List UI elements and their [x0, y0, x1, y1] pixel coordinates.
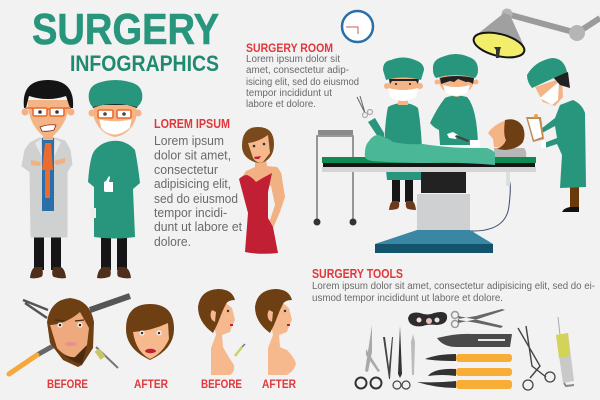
icon: knife — [437, 334, 512, 347]
text block: surgery room: tempor incididunt ut — [246, 88, 332, 99]
illustration: instrument trolley — [314, 130, 356, 226]
text block: lorem ipsum: Lorem ipsum — [154, 133, 224, 148]
icon: orange handled scalpels — [417, 354, 512, 389]
icon: scissors — [452, 309, 505, 328]
text block: surgery tools: SURGERY TOOLS — [312, 267, 403, 281]
illustration: surgeon centre — [430, 54, 478, 145]
labels: before and after: AFTER — [134, 379, 169, 391]
illustration: surgery tools — [356, 309, 574, 390]
icon: hemostat — [518, 326, 555, 390]
text block: lorem ipsum: consectetur — [154, 162, 219, 177]
text block: surgery room: isicing elit, sed do eiusmod — [246, 77, 359, 88]
title: SURGERY — [32, 5, 219, 54]
figure: woman in red dress — [239, 127, 285, 254]
icon: kidney dish — [408, 312, 447, 326]
icon: syringe — [556, 317, 574, 386]
illustration: surgeon left — [357, 58, 424, 210]
illustration: profile after — [255, 289, 296, 375]
illustration: operating table with patient — [322, 119, 536, 253]
text block: lorem ipsum: tempor incidi- — [154, 205, 227, 220]
text block: surgery room — [246, 43, 359, 110]
illustration: face after — [126, 304, 174, 360]
text block: lorem ipsum: dolore. — [154, 234, 191, 249]
text block: surgery tools — [312, 267, 595, 304]
text block: surgery room: labore et dolore. — [246, 99, 316, 110]
text block: surgery tools: Lorem ipsum dolor sit amet, consectetur adipisicing elit, sed do ei- — [312, 281, 595, 292]
text block: lorem ipsum — [154, 116, 242, 249]
text block: lorem ipsum: dunt ut labore et — [154, 219, 242, 234]
text block: lorem ipsum: sed do eiusmod — [154, 191, 238, 206]
text block: surgery room: amet, consectetur adip- — [246, 65, 349, 76]
icon: thin scissors — [393, 326, 410, 389]
labels: before and after: AFTER — [262, 379, 297, 391]
icon: wall clock — [342, 11, 373, 42]
illustration: profile before — [198, 289, 245, 375]
illustration: face surgery before — [9, 296, 130, 374]
illustration: surgeon with clipboard — [526, 58, 586, 212]
labels: before and after: BEFORE — [47, 379, 88, 391]
text block: surgery tools: usmod tempor incididunt ut labore et dolore. — [312, 293, 503, 304]
icon: large scissors — [356, 325, 382, 388]
figure: doctor in white coat — [22, 80, 74, 278]
text block: lorem ipsum: LOREM IPSUM — [154, 116, 230, 131]
icon: probe — [411, 334, 415, 375]
text block: surgery room: SURGERY ROOM — [246, 43, 333, 55]
labels: before and after — [47, 379, 297, 391]
text block: lorem ipsum: dolor sit amet, — [154, 148, 231, 162]
title — [32, 5, 219, 76]
text block: lorem ipsum: adipisicing elit, — [154, 176, 231, 191]
icon: operating lamp — [471, 8, 600, 62]
figure: surgeon with thumbs up — [88, 80, 142, 278]
icon: tweezers — [383, 337, 393, 379]
labels: before and after: BEFORE — [201, 379, 242, 391]
title: INFOGRAPHICS — [70, 51, 219, 76]
text block: surgery room: Lorem ipsum dolor sit — [246, 54, 340, 65]
